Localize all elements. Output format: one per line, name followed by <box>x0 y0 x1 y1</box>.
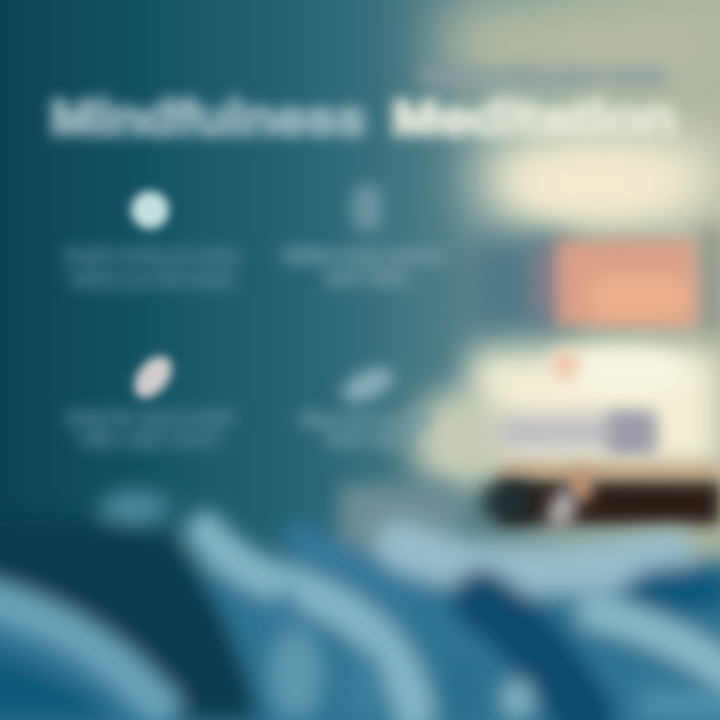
text block: Breathe slowly and deeply <box>65 245 241 267</box>
icon: pill <box>126 349 180 405</box>
kicker: Bedtime Relaxation Guide <box>420 66 666 88</box>
lamp shade <box>556 240 696 326</box>
nightstand <box>500 464 720 482</box>
text block: Soften body tension <box>283 245 445 267</box>
books on nightstand <box>498 415 648 449</box>
text block: Sleep more soundly <box>300 409 431 431</box>
text block <box>65 407 235 451</box>
text block: and relax <box>325 267 410 289</box>
tip 4: icon and text <box>300 360 431 451</box>
icon: candle <box>352 185 382 231</box>
text block <box>283 245 445 289</box>
bed blanket <box>0 485 720 720</box>
text block <box>300 409 431 451</box>
text block: before you fall asleep <box>70 269 235 291</box>
tip 2: icon and text <box>283 185 445 289</box>
title: Mindfulness <box>50 90 366 146</box>
icon: moon <box>131 191 169 229</box>
bedroom scene <box>410 0 720 535</box>
text block: with calm focus <box>79 429 220 451</box>
text block: every night <box>325 429 410 451</box>
icon: cloud <box>337 360 399 410</box>
tip 3: icon and text <box>65 349 235 451</box>
blanket base colour <box>0 690 720 720</box>
tip 1: icon and text <box>65 191 241 291</box>
text block: Quiet the mind tonight <box>65 407 235 429</box>
title: Meditation <box>392 90 676 146</box>
text block <box>65 245 241 291</box>
title <box>50 90 676 146</box>
lamp glow <box>470 350 720 470</box>
